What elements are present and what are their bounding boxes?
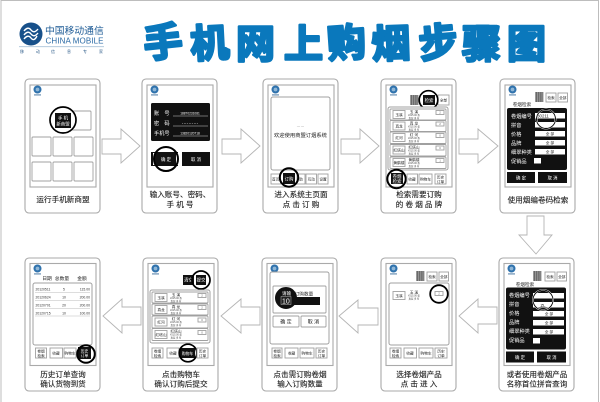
arrow: step 4 to 5 [459,129,498,163]
history table: 10 [62,312,66,316]
buttons [273,316,326,327]
bottom menu: 订购 [285,176,294,182]
panel: step 2 login [142,79,217,213]
cart list: 真 龙 [172,304,181,309]
search form: 卷烟编号 [509,291,530,299]
bottom menu: 订单 [318,353,325,358]
history table: 5 [63,288,65,292]
brand list: 2 [439,112,441,114]
search form: 促销品 [511,157,527,165]
brand list: ¥215.00 条 [408,161,420,165]
bottom menu: 历史 [318,348,325,354]
caption: 选择卷烟产品 [396,369,442,379]
search form: 促销品 [509,336,525,344]
bottom menu: 购物车 [182,351,193,356]
search form: 价格 [511,130,522,138]
panel: step 2 login: 账 号 [154,109,170,117]
bottom menu [390,348,447,358]
table headers [42,275,87,282]
arrow: step 5 to 6 [519,216,552,254]
table headers: 总数量 [55,275,69,282]
logo: China Mobile: 专 [83,48,87,54]
quantity dialog: 订购数量 [295,290,314,298]
panel: step 2 login: 手 机 号 [166,199,194,209]
panel: step 7 select product [381,258,456,391]
search form: 卷烟编号 [511,112,532,120]
panel: step 6 search by pinyin: 名称首位拼音查询 [507,378,568,388]
logo: China Mobile: 家 [99,48,103,54]
brand list: ¥215.00 条 [408,136,420,140]
logo: China Mobile: CHINA MOBILE [46,36,104,46]
panel: step 6 search by pinyin: 检索 [546,274,554,279]
buttons: 确 定 [161,156,172,163]
panel: step 4 search brands: 检索 [425,97,434,104]
product list: 真层 多 有 [409,296,420,300]
caption: 运行手机新商盟 [36,194,90,204]
bottom menu: 卷烟 [393,173,402,180]
panel: step 7 select product: 全部 [440,274,448,279]
clear and submit buttons: 提交 [197,276,206,284]
cart list: 真层 多 有 [171,336,182,340]
bottom menu [272,348,327,358]
caption: 点击需订购卷烟 [273,369,327,379]
cart list: ¥215.00 条 [170,320,182,324]
panel: step 2 login: 密 码 [154,119,170,127]
search form: 30211 [537,114,549,119]
brand list: 红塔山 [393,148,405,152]
brand list: ¥215.00 条 [408,124,420,128]
search form: 全 部 [546,131,555,136]
brand list: 真层 多 有 [409,139,420,143]
history table: 200.00 [80,304,90,308]
caption: 历史订单查询 [40,369,86,379]
cart list: 0 [201,332,203,334]
buttons [506,352,566,362]
logo: China Mobile: 中国移动通信 [45,24,104,37]
cart list: 红河 [157,320,165,324]
quantity dialog [273,286,326,313]
brand list: 真层 多 有 [409,152,420,156]
bottom menu: 检索 [154,353,161,358]
product list: 玉溪 [395,293,403,298]
bottom menu: 检索 [37,353,45,358]
arrow: step 8 to 9 [221,299,260,333]
panel: step 7 select product: 点 击 进 入 [401,378,438,388]
panel: step 4 search brands: 全部 [440,98,447,102]
panel: step 7 select product: 检索 [428,274,436,279]
search form: ZL [540,303,546,308]
logo: China Mobile: 移 [20,48,24,54]
title: 手机网上购烟步骤图 [141,20,546,67]
search form: 拼音 [511,121,521,129]
brand list: 黄鹤楼 [408,157,420,162]
history table: 200.00 [80,296,90,300]
buttons: 取 消 [547,174,558,182]
cart list: 红 河 [172,316,181,321]
brand list: 真 龙 [410,120,419,125]
panel: step 5 search by code: 卷烟检索 [513,101,532,108]
cart list: 红塔山 [155,332,167,337]
search form: 细翠种类 [511,148,532,156]
caption: 检索需要订购 [396,189,442,199]
cart list: 真龙 [157,307,165,312]
arrow: step 1 to 2 [102,129,140,163]
bottom menu: 购物车 [420,350,432,356]
search form [507,108,567,170]
panel: step 5 search by code: 全部 [559,95,567,100]
brand list: ¥215.00 条 [408,113,420,117]
brand list: 玉溪 [395,112,403,117]
bottom menu: 检索 [273,353,281,358]
caption: 使用烟编卷码检索 [508,194,569,204]
brand list: 1 [439,160,441,162]
caption: 进入系统主页面 [274,189,328,199]
panel: step 3 main page: ······ [296,124,304,129]
brand list: 真层 多 有 [409,127,420,131]
search form: 全 部 [546,140,555,145]
cart list [150,290,210,343]
bottom menu: 订单 [437,179,444,184]
history table: 20120701 [36,304,51,308]
panel: step 5 search by code: 检索 [547,95,555,100]
bottom menu: 设置 [319,176,327,182]
history table: 20 [62,304,66,308]
buttons: 确 定 [516,174,527,182]
brand list: 红 河 [410,132,419,137]
logo: China Mobile [19,22,104,54]
bottom menu [152,344,208,362]
panel: step 6 search by pinyin [499,258,574,391]
bottom menu: 历史 [437,348,445,354]
panel: step 1 run app [25,79,100,213]
cart list: 2 [201,294,203,298]
bottom menu: 互动 [308,176,315,182]
clear and submit buttons [183,271,210,289]
search form: 品牌 [509,318,519,326]
bottom menu: 助 [299,176,303,182]
panel: step 4 search brands [381,79,456,213]
search form: 全 部 [545,320,554,325]
brand list: 玉 溪 [410,109,419,114]
history table [33,283,92,345]
buttons [151,147,210,171]
quantity dialog: 请输 [282,290,291,297]
bottom menu: 收藏 [408,176,416,182]
bottom menu: 订单 [199,353,206,358]
panel: step 9 cart submit: 确认订购后提交 [154,378,208,388]
cart list: 玉 溪 [172,292,181,297]
brand list: 0 [439,147,441,150]
history table: 100.00 [80,312,90,316]
cart list: 真层 多 有 [171,311,182,315]
panel: step 6 search by pinyin: 卷烟检索 [516,281,535,288]
buttons [507,172,567,183]
table headers: 日期 [42,276,52,282]
bottom menu: 收藏 [52,350,60,356]
bottom menu [387,170,446,188]
panel: step 3 main page: 欢迎使用商盟订烟系统 [274,131,328,139]
bottom menu: 首页 [272,176,280,182]
cart list: 真层 多 有 [171,323,182,327]
history table: 10 [62,296,66,300]
bottom menu: 收藏 [406,350,414,356]
history table: 20120624 [36,296,51,300]
cart list: ¥215.00 条 [170,308,182,312]
buttons: 确 定 [515,354,526,361]
bottom menu: 历史 [81,348,88,354]
arrow: step 9 to 10 [103,299,141,333]
search form: 全 部 [545,311,554,316]
cart list: 0 [201,319,203,322]
cart list: 玉溪 [157,295,165,300]
panel: step 2 login: ·········· [182,121,199,127]
brand list: 2 [439,123,441,126]
app icon highlighted: 手 机 [58,114,69,122]
panel: step 6 search by pinyin: 全部 [558,274,566,279]
panel: step 2 login: 18870231081 [180,112,200,116]
panel: step 4 search brands: 的 卷 烟 品 牌 [396,199,443,209]
panel: step 8 enter quantity: 输入订购数量 [277,378,323,388]
clear and submit buttons: 清空 [184,276,193,284]
arrow: step 6 to 7 [459,299,497,333]
bottom menu: 历史 [199,348,206,354]
product list: 玉 溪 [410,290,419,294]
quantity dialog: 10 [282,299,290,306]
brand list: ¥215.00 条 [408,148,420,152]
logo: China Mobile: 息 [67,48,71,54]
bottom menu: 购物车 [420,176,431,182]
arrow: step 3 to 4 [341,129,379,163]
cart list: 2 [201,306,203,310]
arrow: step 7 to 8 [339,300,378,333]
brand list: 红塔山 [408,144,420,150]
search form: 细翠种类 [509,327,530,335]
panel: step 9 cart submit [143,258,218,391]
buttons: 确 定 [280,318,292,326]
panel: step 3 main page: 点 击 订 购 [283,199,320,209]
product list: ¥215.00 条 [408,294,420,298]
history table: 20120511 [36,288,50,292]
search form: 价格 [509,309,520,317]
bottom menu: 历史 [437,174,444,180]
bottom menu [36,345,95,363]
bottom menu: 卷烟 [154,348,161,354]
bottom menu: 收藏 [288,350,295,356]
cart list: ¥215.00 条 [170,332,182,336]
search form: 全 部 [545,329,554,334]
panel: step 2 login: 手机号 [154,129,170,137]
brand list: 真龙 [395,124,403,128]
bottom menu: 卷烟 [37,348,45,354]
cart list: ¥215.00 条 [170,296,182,300]
history table: 115.00 [80,288,90,292]
buttons: 取 消 [308,318,319,326]
bottom menu [271,168,328,187]
app icon highlighted [50,107,76,133]
panel: step 3 main page [263,79,338,213]
arrow: step 2 to 3 [222,129,260,163]
bottom menu: 卷烟 [273,348,281,354]
caption: 输入账号、密码、 [150,189,210,199]
panel: step 10 order history [25,258,100,391]
search form: 拼音 [509,300,519,308]
search form: 全 部 [546,149,555,154]
bottom menu: 订单 [81,353,88,358]
bottom menu: 购物车 [301,350,313,356]
search form: 品牌 [511,139,521,147]
brand list: 0 [439,134,441,138]
app icon highlighted: 新商盟 [56,120,70,128]
history table: 20120715 [36,312,51,316]
brand list: 黄鹤楼 [393,160,405,165]
buttons: 取 消 [546,354,557,361]
product list [389,283,449,345]
brand list: 真层 多 有 [409,164,420,168]
bottom menu: 订单 [437,353,445,358]
bottom menu: 购物车 [64,350,76,356]
logo: China Mobile: 信 [51,48,55,54]
bottom menu: 收藏 [169,350,177,356]
product list: 2 [438,292,440,296]
cart list: 红塔山 [170,328,182,334]
panel: step 5 search by code [500,79,575,213]
table headers: 金额 [77,275,87,282]
brand list [388,107,448,170]
panel: step 10 order history: 确认货物到货 [40,378,86,388]
caption: 点击购物车 [162,369,200,379]
bottom menu: 检索 [392,353,399,358]
brand list: 红河 [395,135,403,140]
caption: 或者使用卷烟产品 [507,369,568,379]
bottom menu: 卷烟 [392,348,399,354]
panel: step 2 login: 13820120718 [180,132,200,136]
buttons: 取 消 [191,156,202,163]
brand list: 真层 多 有 [409,116,420,120]
search form [506,288,566,350]
panel: step 8 enter quantity [262,258,337,391]
cart list: 真层 多 有 [171,299,182,303]
logo: China Mobile: 动 [36,48,40,54]
bottom menu: 检索 [393,178,402,185]
